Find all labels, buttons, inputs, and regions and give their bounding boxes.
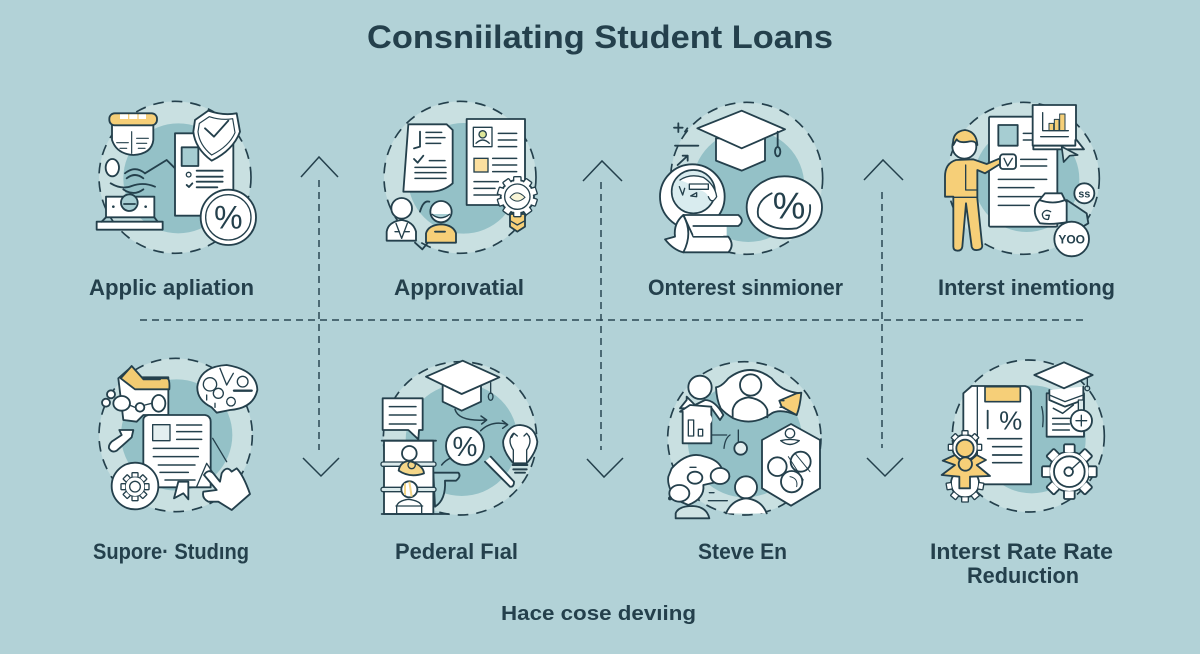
percent ellipse (747, 176, 822, 238)
money bag and coins: ss (1078, 188, 1090, 200)
icon: approval (384, 101, 537, 253)
presenter with chart box (680, 376, 747, 455)
arrow: column three vertical (864, 160, 903, 476)
arrow: column two vertical (583, 161, 623, 477)
percent badge (201, 190, 256, 245)
label: approval: Approıvatial (394, 275, 524, 300)
icon: support (99, 358, 257, 512)
shield (193, 111, 240, 161)
speech bubble (383, 398, 423, 439)
percent badge: % (214, 200, 243, 236)
title: Consniilating Student Loans (367, 19, 833, 55)
cursor (1062, 147, 1078, 162)
large gear gauge (1042, 444, 1097, 499)
folder (118, 366, 169, 422)
graduation cap document (1034, 362, 1093, 437)
document (989, 117, 1057, 227)
plus, line and arrow marks (674, 123, 698, 165)
laptop chart (1033, 105, 1084, 149)
checklist document (403, 124, 453, 192)
profile document (467, 119, 525, 205)
light bulb (503, 425, 537, 473)
label: support studying: Supore· Studıng (93, 539, 249, 564)
hexagon shield with coins (762, 424, 820, 506)
hand (197, 438, 250, 510)
icon: interest presentation (945, 102, 1099, 256)
percent ellipse: % (773, 185, 805, 226)
label: steve: Steve En (698, 539, 787, 564)
icon: application (97, 101, 256, 253)
horizontal divider (140, 319, 1087, 321)
label: application: Applic apliation (89, 275, 254, 300)
cursor arrow (109, 430, 133, 452)
speech faces with banner (109, 113, 157, 155)
money bag and coins (1035, 183, 1094, 256)
people bubble (197, 365, 257, 413)
person speech bubble (716, 370, 801, 422)
icon: federal (381, 361, 537, 515)
gear seal (497, 177, 537, 232)
people with headset (668, 455, 767, 518)
label: federal: Pederal Fıal (395, 539, 518, 564)
person pointing (945, 130, 1016, 251)
icon: support team (668, 362, 821, 518)
globe (660, 164, 725, 229)
percent document (963, 386, 1031, 484)
bubbles chain (102, 390, 165, 412)
arrow: column one vertical (301, 157, 339, 476)
magnifier percent (446, 427, 514, 487)
icon: interest (660, 102, 823, 254)
money bag and coins: YOO (1058, 233, 1085, 247)
label: interest rate reduction: Reduıction (967, 563, 1079, 588)
label: interest rate reduction (930, 539, 1113, 588)
laptop (97, 194, 163, 230)
magnifier percent: % (453, 431, 477, 462)
flow arrows (442, 409, 508, 465)
label: interest inemtiong: Interst inemtiong (938, 275, 1115, 300)
percent document: % (999, 405, 1022, 435)
graduation cap (697, 111, 785, 171)
label: interest sinmioner: Onterest sinmioner (648, 275, 843, 300)
book stack with people (381, 441, 460, 514)
label: interest rate reduction: Interst Rate Rate (930, 539, 1113, 564)
two people (387, 198, 456, 249)
scroll (665, 215, 742, 252)
waves and connector (106, 159, 175, 193)
icon: interest rate reduction (942, 360, 1104, 512)
gear circle (112, 463, 158, 509)
people with gear (942, 431, 990, 502)
document (175, 133, 233, 216)
footer caption: Hace cose devıing (501, 603, 696, 625)
document with ribbon (143, 415, 211, 499)
graduation cap (426, 361, 499, 411)
